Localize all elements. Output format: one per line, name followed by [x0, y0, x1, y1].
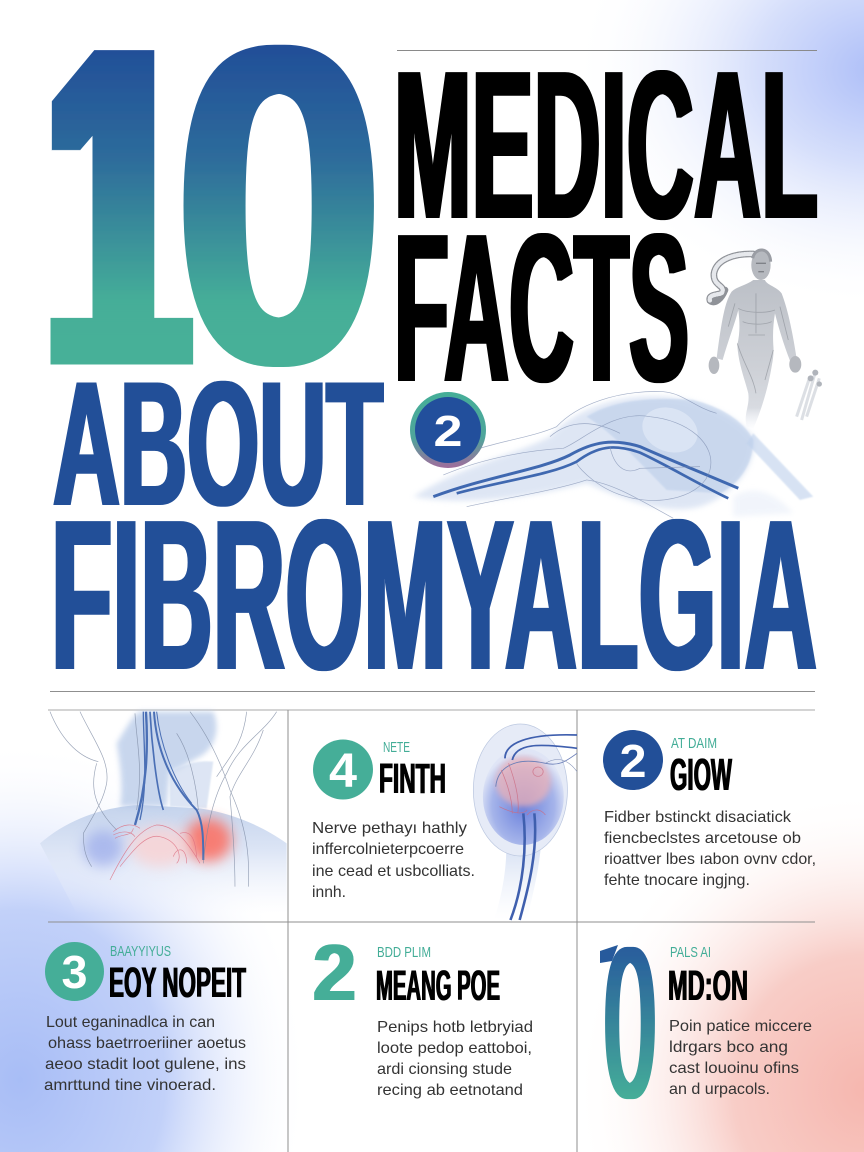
title: ABOUT: ABOUT — [53, 344, 383, 543]
panel 2: label: NETE — [383, 739, 410, 756]
panel 5: body text: loote pedop eattoboi, — [377, 1040, 532, 1057]
panel 3: body text: fiencbeclstes arcetouse ob — [604, 830, 801, 847]
panel 6: body text — [669, 1018, 812, 1098]
hands — [709, 356, 801, 374]
illustration: arm nerves — [413, 392, 813, 518]
panel 2: body text — [312, 820, 475, 901]
panel 6: body text: ldrgars bco ang — [669, 1039, 788, 1056]
panel 6: body text: an d urpacols. — [669, 1081, 770, 1098]
panel 3: icon circle 2 — [603, 730, 663, 790]
panel 4: body text — [44, 1014, 246, 1094]
panel 5: label: BDD PLIM — [377, 944, 431, 961]
panel 6: heading: MD:ON — [668, 962, 748, 1010]
panel 4: heading: EOY NOPEIT — [109, 959, 246, 1007]
panel 3: body text: Fidber bstinckt disaciatick — [604, 809, 792, 826]
panel 6: tall number 0 — [600, 902, 656, 1143]
panel 4: icon circle 3: 3 — [62, 946, 88, 998]
badge: number 2 — [410, 392, 486, 468]
muscle lines — [728, 293, 788, 393]
panel 2: body text: Nerve pethayı hathly — [312, 820, 467, 837]
illustration: human figure — [709, 250, 822, 428]
panel 2: heading: FINTH — [379, 755, 446, 803]
panel 4: body text: amrttund tine vinoerad. — [44, 1077, 216, 1094]
panel 2: body text: innh. — [312, 884, 346, 901]
panel 4: icon circle 3 — [45, 942, 104, 1001]
panel 2: icon circle 4: 4 — [329, 745, 357, 798]
panel 5: body text — [377, 1019, 533, 1099]
panel 3: body text: fehte tnocare ingjng. — [604, 872, 750, 889]
panel 5: big number 2: 2 — [313, 928, 356, 1017]
head — [751, 250, 771, 280]
badge: number 2: 2 — [434, 407, 462, 456]
panel 4: label: BAAYYIYUS — [110, 943, 171, 960]
panel 2: nerve joint illustration — [473, 724, 577, 920]
panel 4: body text: Lout eganinadlca in can — [46, 1014, 215, 1031]
small fingers — [797, 373, 819, 420]
panel 2: body text: ine cead et usbcolliats. — [312, 863, 475, 880]
panel 1: neck and shoulder illustration — [40, 712, 287, 913]
panel 3: body text — [604, 809, 816, 889]
panel 5: body text: recing ab eetnotand — [377, 1082, 523, 1099]
hair braid — [710, 254, 753, 302]
panel 3: icon circle 2: 2 — [620, 735, 646, 787]
panel 4: body text: ohass baetrroeriiner aoetus — [48, 1035, 246, 1052]
panel 6: body text: cast louoinu ofins — [669, 1060, 799, 1077]
panel 6: label: PALS AI — [670, 944, 711, 961]
grid lines — [48, 692, 815, 1152]
panel 2: icon circle 4 — [313, 740, 373, 800]
panel 2: body text: inffercolnieterpcoerre — [312, 841, 464, 858]
panel 3: label: AT DAIM — [671, 735, 717, 752]
body, arms and legs — [717, 280, 797, 428]
text: 0 — [604, 902, 656, 1143]
panel 6: body text: Poin patice miccere — [669, 1018, 812, 1035]
panel 5: body text: Penips hotb letbryiad — [377, 1019, 533, 1036]
text: MEANG POE — [376, 962, 500, 1010]
panel 4: body text: aeoo stadit loot gulene, ins — [45, 1056, 246, 1073]
panel 5: body text: ardi cionsing stude — [377, 1061, 512, 1078]
panel 3: body text: rioattver lbes ıabon ovnv cdor, — [604, 851, 816, 868]
text: GIOW — [670, 749, 732, 800]
